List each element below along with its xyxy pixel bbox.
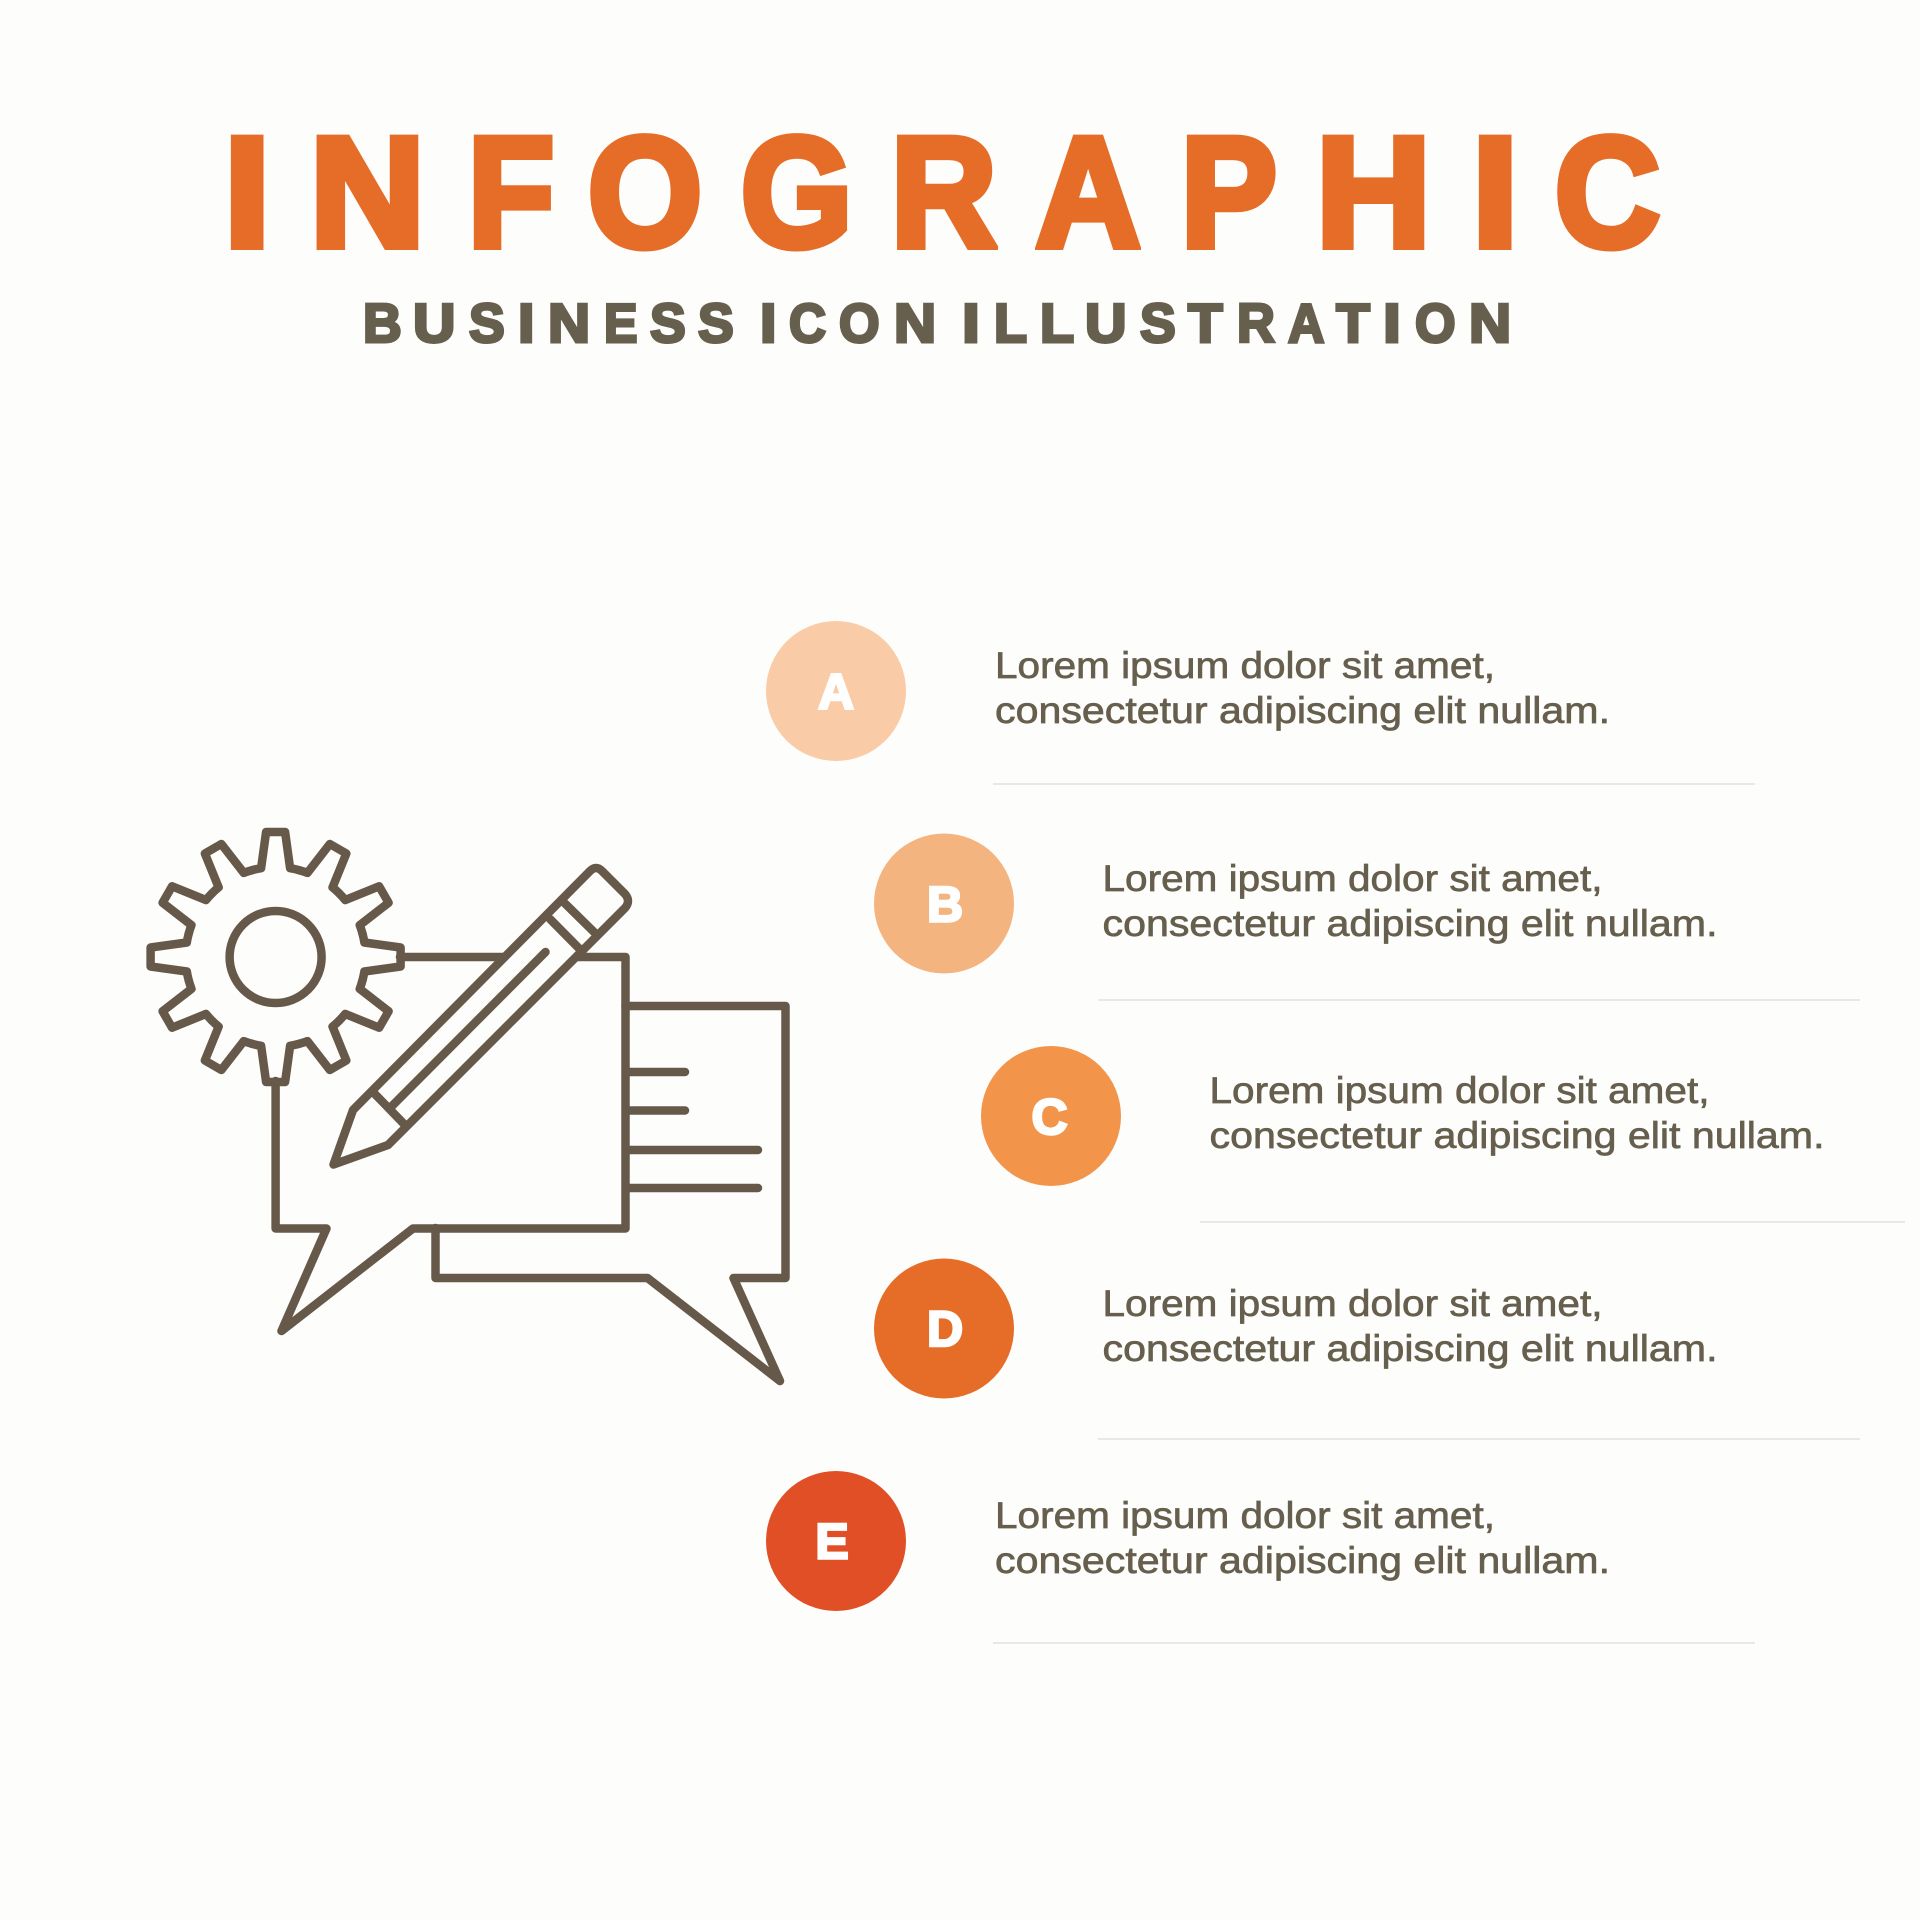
badge A [766, 621, 906, 761]
subtitle: E [604, 292, 637, 354]
subtitle: N [894, 292, 936, 354]
badge B [874, 834, 1014, 974]
title: A [1036, 106, 1140, 280]
subtitle [363, 292, 1511, 354]
badge E [766, 1471, 906, 1611]
badge E: E [815, 1514, 849, 1570]
text A [995, 645, 1610, 731]
subtitle: S [698, 292, 733, 354]
title: O [588, 106, 702, 280]
item E [766, 1471, 1755, 1644]
subtitle: L [994, 292, 1027, 354]
icon: pencil [334, 868, 628, 1164]
text C: consectetur adipiscing elit nullam. [1210, 1115, 1824, 1156]
title [224, 106, 1660, 280]
title: G [741, 106, 852, 280]
subtitle: O [839, 292, 880, 354]
subtitle: I [1383, 292, 1401, 354]
badge A: A [818, 664, 854, 720]
title: C [1555, 106, 1660, 280]
badge D [874, 1258, 1014, 1398]
subtitle: A [1288, 292, 1325, 354]
icon: text lines [626, 1072, 758, 1188]
title: R [891, 106, 997, 280]
title: I [1472, 106, 1519, 280]
subtitle: S [1140, 292, 1175, 354]
text B: consectetur adipiscing elit nullam. [1102, 903, 1718, 944]
text A: Lorem ipsum dolor sit amet, [995, 645, 1495, 686]
subtitle: C [789, 292, 826, 354]
subtitle: R [1237, 292, 1275, 354]
subtitle: S [650, 292, 685, 354]
text E: Lorem ipsum dolor sit amet, [995, 1495, 1495, 1536]
text C: Lorem ipsum dolor sit amet, [1210, 1070, 1710, 1111]
item D [874, 1258, 1860, 1440]
title: H [1316, 106, 1431, 280]
icon: gear [151, 832, 401, 1082]
title: N [310, 106, 425, 280]
subtitle: U [1085, 292, 1126, 354]
text E [995, 1495, 1610, 1581]
title: F [468, 106, 554, 280]
subtitle: T [1188, 292, 1223, 354]
badge C: C [1031, 1089, 1068, 1145]
item A [766, 621, 1755, 785]
badge D: D [927, 1301, 963, 1357]
subtitle: B [363, 292, 401, 354]
badge C [981, 1046, 1121, 1186]
subtitle: T [1336, 292, 1370, 354]
icon: back speech bubble [436, 1006, 786, 1381]
subtitle: O [1415, 292, 1456, 354]
text D [1102, 1283, 1718, 1369]
text A: consectetur adipiscing elit nullam. [995, 690, 1610, 731]
item C [981, 1046, 1905, 1223]
icon: front speech bubble [276, 957, 626, 1331]
subtitle: I [962, 292, 980, 354]
text C [1210, 1070, 1824, 1156]
text D: consectetur adipiscing elit nullam. [1102, 1328, 1718, 1369]
title: I [224, 106, 270, 280]
subtitle: I [760, 292, 776, 354]
subtitle: N [548, 292, 590, 354]
subtitle: S [469, 292, 504, 354]
badge B: B [927, 876, 963, 932]
title: P [1181, 106, 1277, 280]
item B [874, 834, 1860, 1001]
subtitle: N [1468, 292, 1511, 354]
text E: consectetur adipiscing elit nullam. [995, 1540, 1610, 1581]
text B [1102, 858, 1718, 944]
text B: Lorem ipsum dolor sit amet, [1102, 858, 1602, 899]
subtitle: L [1040, 292, 1074, 354]
text D: Lorem ipsum dolor sit amet, [1102, 1283, 1602, 1324]
subtitle: I [518, 292, 534, 354]
icon: speech bubbles, gear and pencil [151, 832, 786, 1381]
subtitle: U [413, 292, 455, 354]
